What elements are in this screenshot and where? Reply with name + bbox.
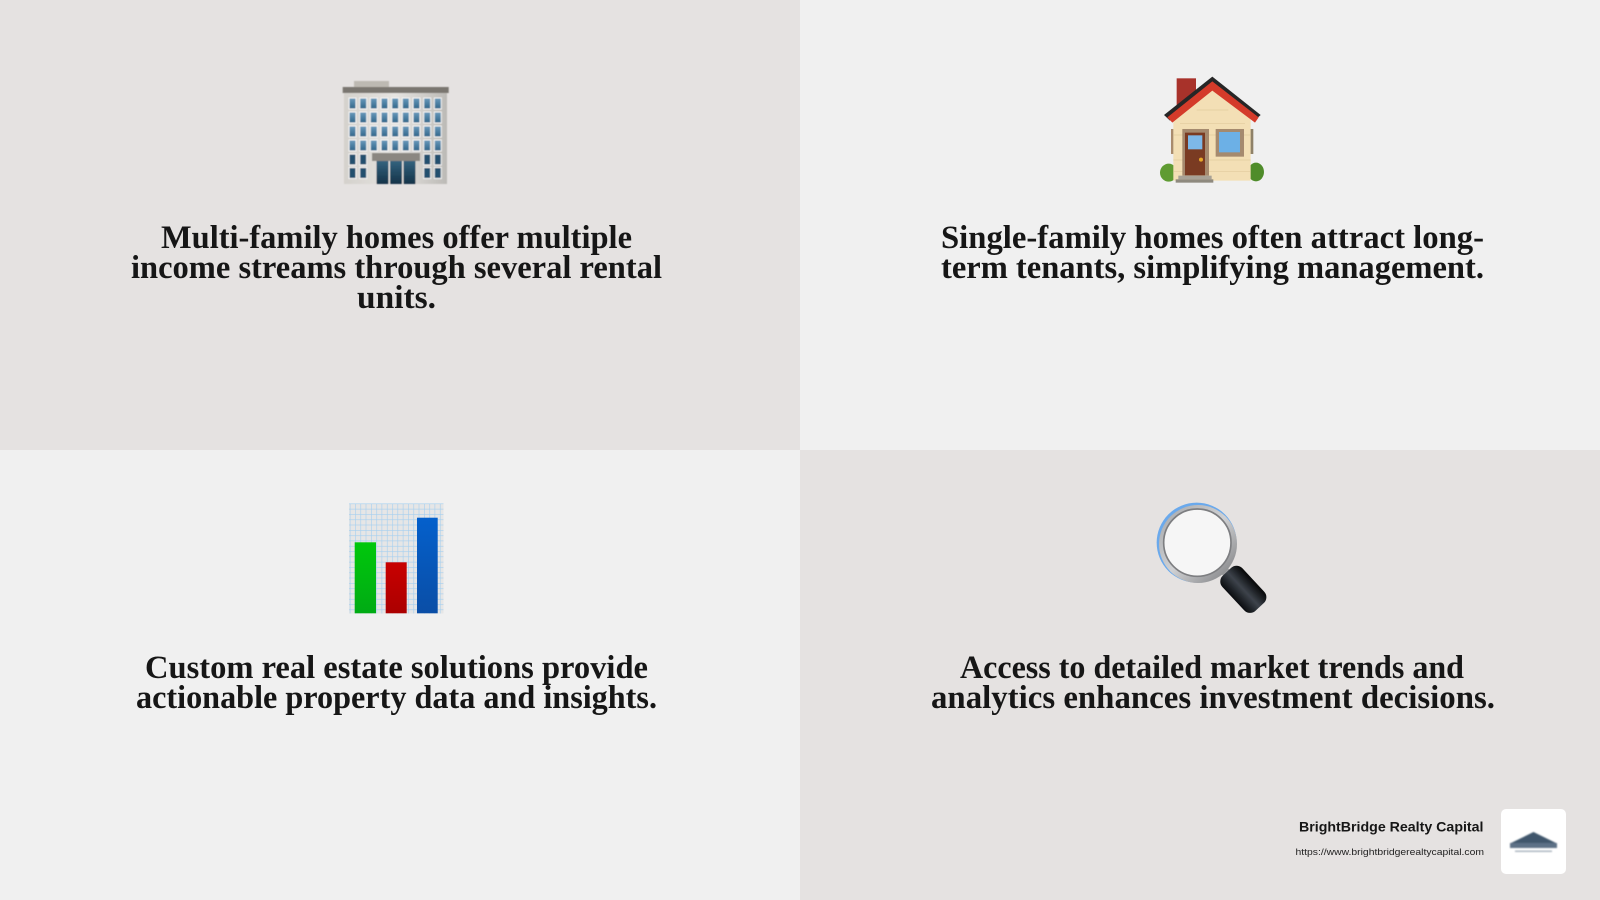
heading: multi-family: Multi-family homes offer multiple xyxy=(161,220,632,256)
logo card xyxy=(1501,809,1566,874)
heading: market trends: analytics enhances investment decisions. xyxy=(931,680,1495,716)
icon: bar chart xyxy=(349,504,444,614)
heading: single-family xyxy=(941,220,1484,286)
brand name: BrightBridge Realty Capital xyxy=(1299,818,1484,834)
heading: custom solutions: actionable property data and insights. xyxy=(136,680,657,716)
heading: multi-family: income streams through several rental xyxy=(131,250,662,286)
red bar xyxy=(386,562,407,613)
icon: apartment building xyxy=(343,81,449,184)
heading: single-family: Single-family homes often attract long- xyxy=(941,220,1484,256)
heading: market trends xyxy=(931,650,1495,716)
panel: single-family homes xyxy=(800,0,1600,450)
panel: custom real estate solutions xyxy=(0,450,800,900)
blue bar xyxy=(417,518,438,613)
heading: multi-family: units. xyxy=(357,280,436,316)
heading: market trends: Access to detailed market trends and xyxy=(960,650,1464,686)
heading: custom solutions xyxy=(136,650,657,716)
heading: multi-family xyxy=(131,220,662,316)
green bar xyxy=(355,542,376,613)
icon: house xyxy=(1160,77,1264,183)
heading: single-family: term tenants, simplifying management. xyxy=(941,250,1484,286)
heading: custom solutions: Custom real estate solutions provide xyxy=(145,650,648,686)
panel: multi-family homes xyxy=(0,0,800,450)
brand block xyxy=(1296,809,1566,874)
brand url: https://www.brightbridgerealtycapital.com xyxy=(1296,847,1484,858)
panel: market trends xyxy=(800,450,1600,900)
icon: magnifying glass xyxy=(1157,503,1270,616)
